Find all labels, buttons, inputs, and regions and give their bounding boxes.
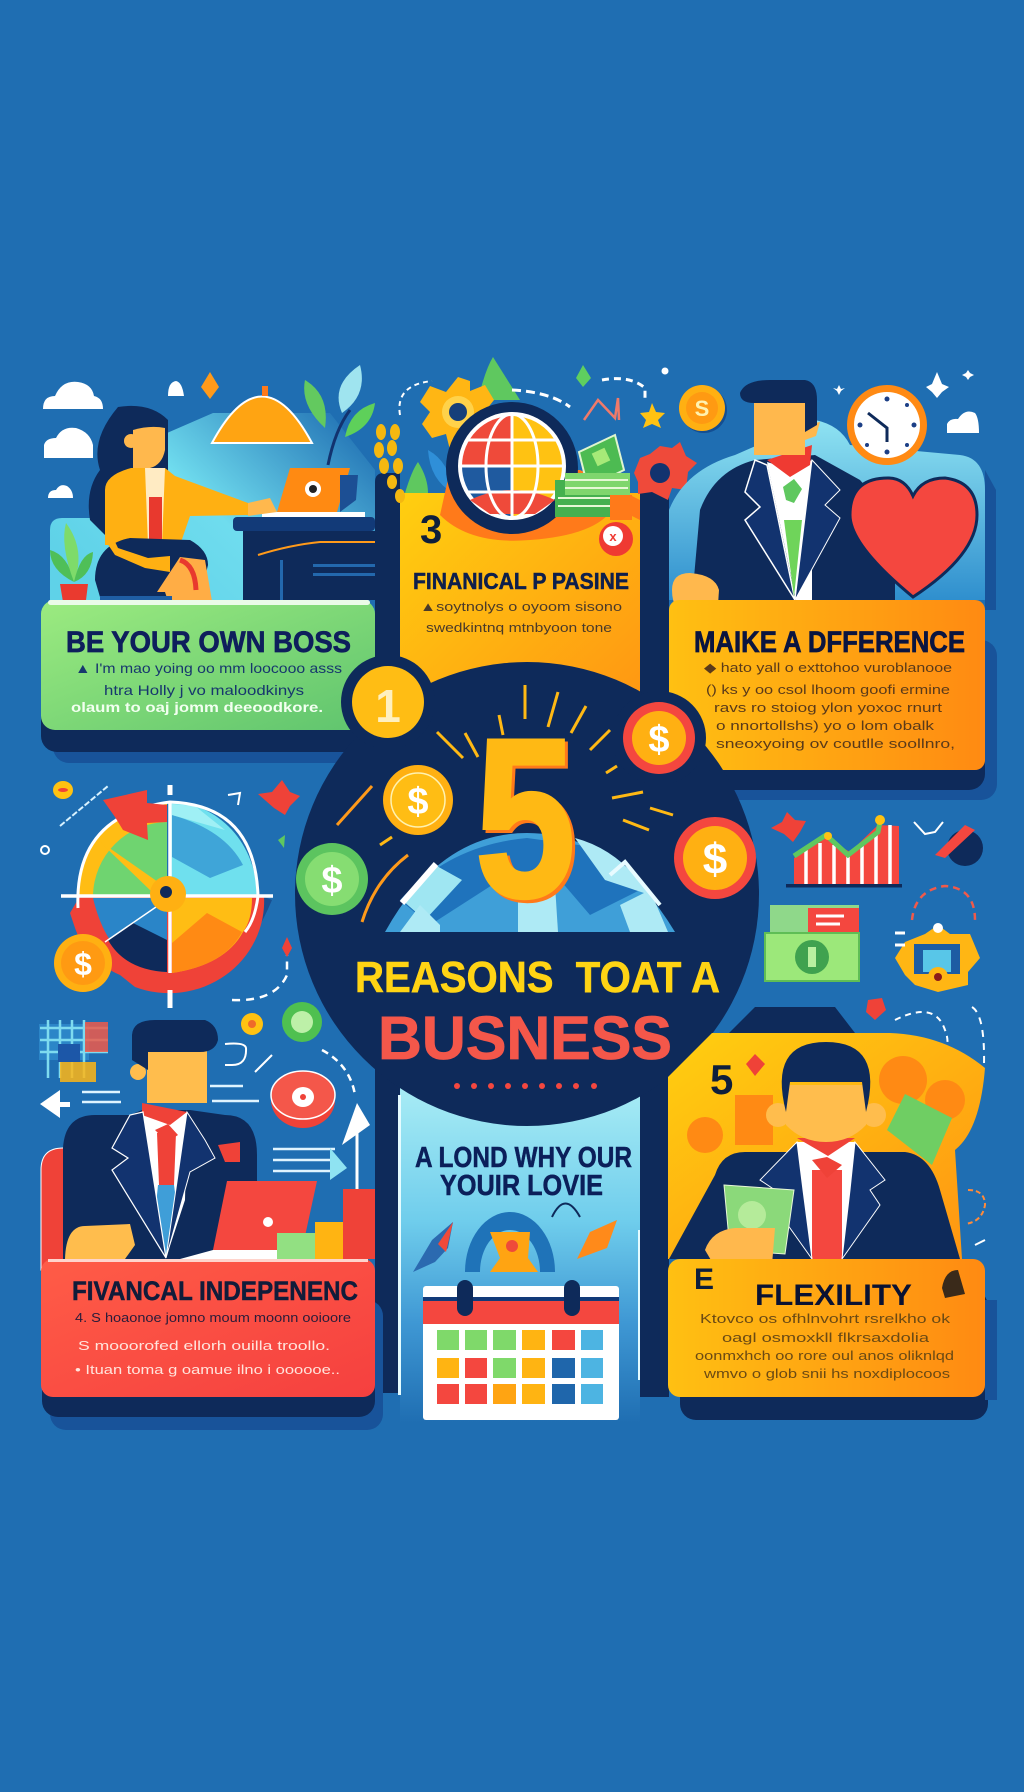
body text — [704, 660, 955, 751]
scene: businessman at laptop — [41, 1020, 375, 1270]
icon: potted plant — [50, 523, 93, 608]
icon: gauge coin — [54, 934, 112, 992]
gauge — [61, 785, 273, 1008]
big number 5: 5 — [475, 693, 576, 945]
scene: woman at desk — [50, 386, 375, 607]
heading: FINANICAL P PASINE — [413, 568, 629, 594]
icon: leaves — [405, 357, 520, 493]
icon: gauge coin: $ — [74, 946, 92, 982]
cyan card: YOUIR LOVIE — [440, 1170, 603, 1202]
title: BUSNESS — [378, 1004, 672, 1072]
title: REASONS TOAT A — [355, 953, 720, 1002]
decorative icons — [39, 1002, 370, 1189]
icon: coin — [679, 385, 727, 433]
body text: oonmxhch oo rore oul anos oliknlqd — [695, 1348, 954, 1363]
icon: small coin — [241, 1013, 263, 1035]
icon: sparkles and cloud — [833, 370, 979, 433]
icon: green coin — [282, 1002, 322, 1042]
icon: bar chart — [786, 815, 902, 888]
body text: o nnortollshs) yo o lom obalk — [716, 718, 935, 733]
dashed ornaments — [912, 886, 975, 920]
icon: orange arrow — [552, 1204, 617, 1259]
red card: • Ituan toma g oamue ilno i oooooe.. — [75, 1362, 340, 1377]
panel: make a difference — [669, 370, 997, 800]
body text: ravs ro stoiog ylon yoxoc rnurt — [714, 700, 943, 715]
icon: left arrow — [40, 1090, 70, 1118]
icon: small red star — [771, 812, 806, 842]
green panel shadow — [53, 640, 383, 763]
body text: oagl osmoxkll flkrsaxdolia — [722, 1330, 930, 1345]
globe dome — [385, 833, 675, 932]
red diamond — [746, 1054, 765, 1076]
icon: coin: S — [695, 396, 709, 421]
title — [355, 953, 720, 1072]
scene: businessman with cash — [669, 1042, 960, 1267]
coin: top right — [612, 691, 706, 785]
dashed connectors — [322, 1050, 355, 1095]
yellow card — [669, 600, 985, 770]
icon: large plant — [304, 365, 375, 465]
background bars — [640, 1100, 669, 1397]
heading: FIVANCAL INDEPENENC — [72, 1276, 358, 1306]
body text: ▲ I'm mao yoing oo mm loocooo asss — [75, 660, 342, 676]
panel: gauge chart — [41, 780, 300, 1008]
body text — [71, 660, 342, 715]
body text: swedkintnq mtnbyoon tone — [426, 620, 612, 635]
panel shadow — [50, 1300, 383, 1430]
body text: wmvo o glob snii hs noxdiplocoos — [703, 1366, 951, 1381]
body text: htra Holly j vo maloodkinys — [104, 682, 304, 698]
panel: flexibility — [640, 812, 997, 1420]
heading: BE YOUR OWN BOSS — [66, 626, 351, 659]
icon: clock — [847, 385, 927, 465]
heading: FLEXILITY — [755, 1279, 912, 1312]
body text: sneoxyoing ov coutlle soollnro, — [716, 736, 955, 751]
icon: red badge — [599, 522, 633, 556]
yellow card — [400, 493, 640, 723]
red card: S mooorofed ellorh ouilla troollo. — [78, 1338, 330, 1353]
icon: rocket — [413, 1222, 453, 1272]
money coins — [687, 1056, 965, 1153]
icon: red button — [271, 1071, 335, 1128]
panel: love what you do (calendar) — [375, 1060, 669, 1423]
icon: gauge with key — [465, 1212, 555, 1272]
heading: A LOND WHY OUR — [415, 1142, 632, 1174]
body text — [420, 599, 622, 635]
navy tab — [729, 1007, 855, 1033]
icon: small red star — [258, 780, 300, 815]
coin: top right: $ — [648, 719, 670, 761]
navy bars — [375, 473, 400, 700]
icon: red star — [103, 790, 167, 840]
icon: heart — [850, 478, 977, 597]
body text: ▲soytnolys o oyoom sisono — [420, 599, 622, 614]
icon: money — [765, 905, 859, 981]
body text: () ks y oo csol lhoom goofi ermine — [706, 682, 950, 697]
decor: dashes and sparkles — [41, 786, 292, 1000]
icon: money stack — [555, 435, 632, 520]
icon: yellow gear — [420, 377, 494, 450]
panel shadow — [700, 640, 997, 800]
icon: small coin — [53, 781, 73, 799]
coin: number 1: 1 — [375, 680, 401, 732]
panel: financial independence — [39, 1002, 383, 1430]
icon: wheat branch — [374, 424, 405, 503]
panel: be your own boss — [41, 365, 383, 763]
coin: right — [674, 817, 756, 899]
icon: red gear — [634, 442, 697, 500]
coin: green — [296, 843, 368, 915]
decor: dashes, sparkle and zigzag — [399, 365, 668, 428]
letter tag: E — [694, 1263, 714, 1296]
decorative icons — [765, 812, 985, 1245]
number: 3 — [420, 508, 442, 552]
panel shadow — [680, 1290, 988, 1420]
icon: frame — [895, 923, 980, 992]
sun rays — [337, 685, 673, 922]
scene: businessman with heart — [669, 380, 996, 618]
red card — [41, 1259, 375, 1397]
coin: left — [383, 765, 453, 835]
central circle — [295, 655, 759, 1126]
lines — [82, 1086, 259, 1102]
orange backdrop — [668, 1033, 985, 1259]
icon: calendar — [423, 1280, 619, 1420]
coin: left: $ — [407, 781, 429, 823]
big number 5: 5 — [478, 696, 579, 948]
green panel card — [41, 600, 375, 730]
body text: olaum to oaj jomm deeoodkore. — [71, 699, 323, 715]
heading: MAIKE A DFFERENCE — [694, 626, 965, 659]
icon: arrows — [273, 1103, 370, 1189]
icon: pen — [935, 825, 983, 866]
body text: 4. S hoaonoe jomno moum moonn ooioore — [75, 1310, 351, 1325]
body text: Ktovco os ofhlnvohrt rsrelkho ok — [700, 1311, 951, 1326]
cyan card — [398, 1087, 641, 1423]
body text: ◆ hato yall o exttohoo vuroblanooe — [704, 660, 952, 675]
panel: financial passion — [374, 357, 697, 723]
coin: right: $ — [703, 835, 727, 884]
coin: number 1 — [341, 655, 435, 749]
number: 5 — [710, 1056, 733, 1103]
icon: pixel grid — [39, 1020, 108, 1082]
body text — [695, 1311, 954, 1381]
tag icon — [942, 1270, 965, 1298]
dots — [454, 1083, 597, 1089]
icon: globe — [440, 402, 640, 541]
icon: red badge: x — [609, 529, 617, 544]
icon: clouds and sparkle — [43, 372, 219, 498]
yellow card — [668, 1259, 985, 1397]
navy bars — [375, 1060, 400, 1393]
coin: green: $ — [321, 860, 343, 902]
